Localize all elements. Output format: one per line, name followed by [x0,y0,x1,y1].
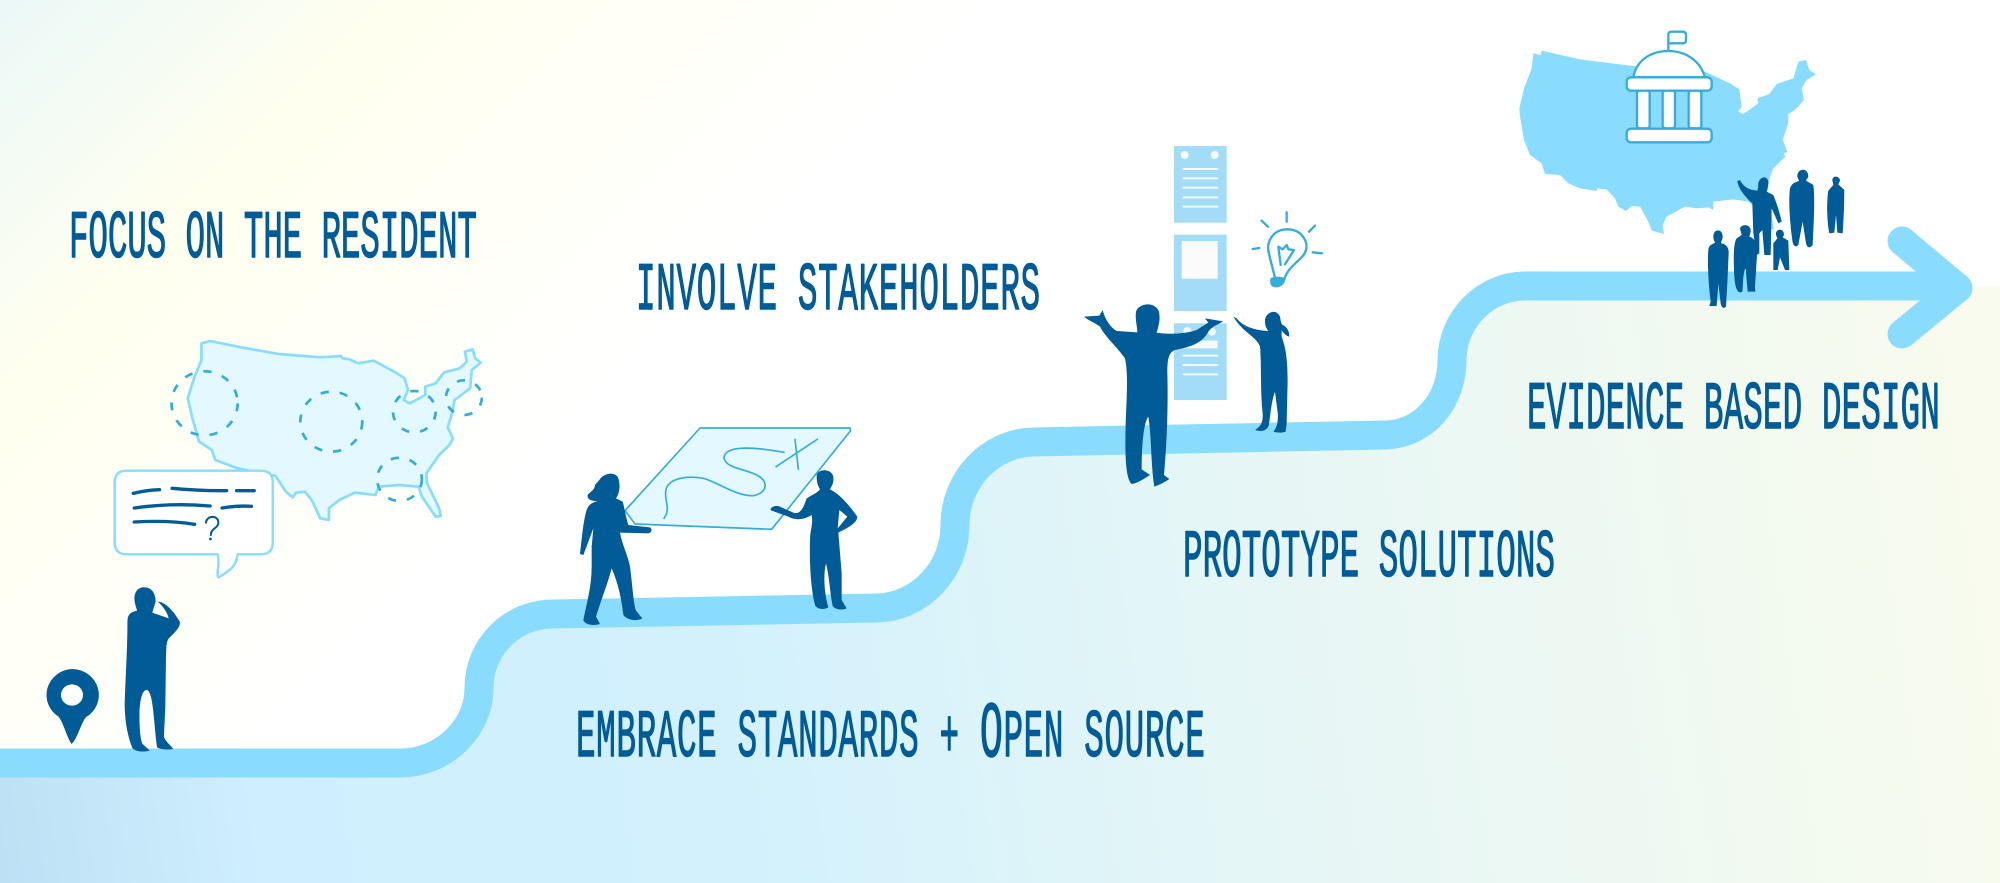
dashed region circles [172,371,482,501]
speech bubble with question [115,471,273,577]
man holding the map [771,470,857,610]
panel: prototype solutions illustration [1084,146,1322,487]
heading: embrace standards and open source: EMBRACE STANDARDS + OPEN SOURCE [576,690,1205,780]
panel: focus on the resident illustration [46,341,482,752]
person looking at the map [125,587,180,752]
wireframe page two [1174,235,1227,311]
person pointing at the pages [1233,312,1289,433]
group of people [1708,170,1844,308]
heading: focus on the resident: FOCUS ON THE RESIDENT [69,202,477,279]
wireframe page three [1174,323,1227,400]
woman holding the map [580,474,652,625]
icon: capitol building [1627,32,1712,142]
heading: involve stakeholders: INVOLVE STAKEHOLDERS [636,254,1040,331]
rising path with arrow [0,241,1958,763]
panel: involve stakeholders illustration [580,428,857,625]
ground area under the path [0,286,2000,883]
heading: prototype solutions: PROTOTYPE SOLUTIONS [1183,521,1555,598]
panel: evidence based design illustration [1519,32,1844,308]
route map sheet [625,428,851,529]
icon: light bulb [1253,212,1322,287]
person with arms raised [1084,304,1223,487]
map: solid United States [1519,51,1816,234]
wireframe page one [1174,146,1227,223]
map: outline of the United States [188,341,481,520]
heading: evidence based design: EVIDENCE BASED DESIGN [1527,373,1940,450]
icon: location pin [46,669,99,744]
